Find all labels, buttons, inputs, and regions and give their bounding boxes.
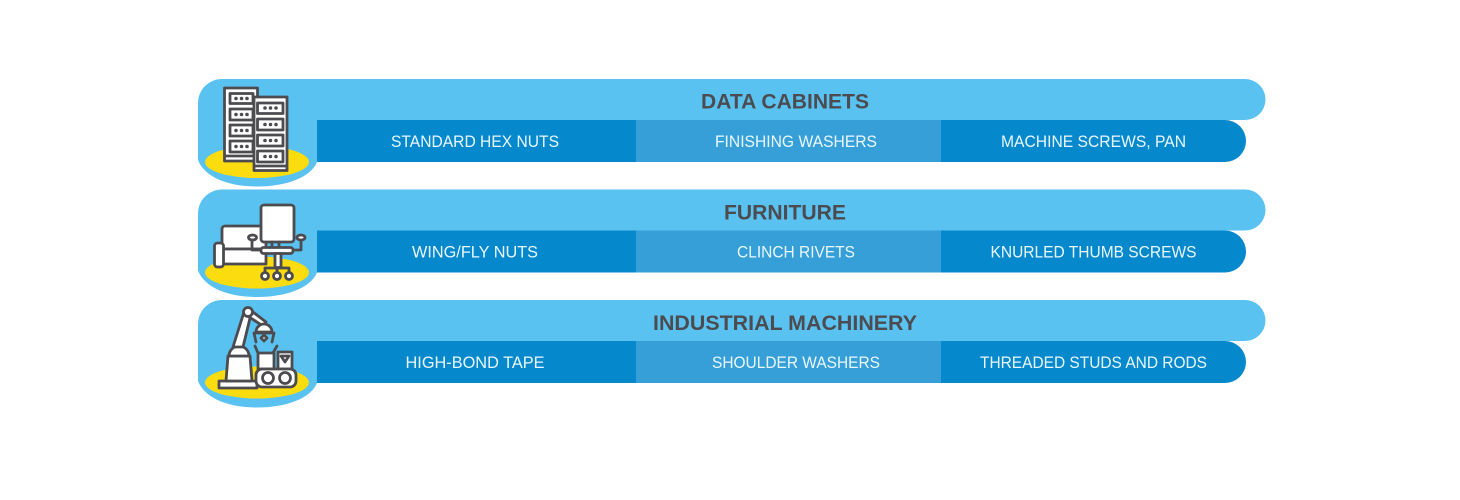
- icon: yellow floor: [205, 256, 309, 288]
- items row: [317, 120, 1246, 162]
- items row: SHOULDER WASHERS: [712, 354, 880, 372]
- items row: [317, 230, 1246, 272]
- items row: [317, 341, 1246, 383]
- items row: STANDARD HEX NUTS: [391, 133, 559, 151]
- heading: FURNITURE: [724, 202, 846, 224]
- icon: yellow floor: [205, 366, 309, 398]
- items row: FINISHING WASHERS: [715, 133, 877, 151]
- items row: MACHINE SCREWS, PAN: [1001, 133, 1186, 151]
- heading: INDUSTRIAL MACHINERY: [653, 312, 917, 335]
- items row: THREADED STUDS AND RODS: [980, 354, 1207, 372]
- icon: yellow floor: [205, 146, 309, 178]
- header bar with icon tab: [198, 190, 1266, 297]
- items row: KNURLED THUMB SCREWS: [990, 244, 1196, 262]
- items row: HIGH-BOND TAPE: [406, 354, 544, 372]
- panel: furniture: [198, 190, 1266, 297]
- heading: DATA CABINETS: [701, 90, 869, 114]
- panel: data cabinets: [198, 79, 1265, 186]
- icon: robot arm and conveyor: [219, 308, 296, 388]
- header bar with icon tab: [198, 300, 1266, 408]
- icon: sofa and office chair: [214, 205, 305, 280]
- items row: CLINCH RIVETS: [737, 244, 855, 262]
- panel: industrial machinery: [198, 300, 1266, 408]
- header bar with icon tab: [198, 79, 1265, 186]
- icon: server cabinets: [224, 88, 287, 170]
- items row: WING/FLY NUTS: [412, 244, 538, 262]
